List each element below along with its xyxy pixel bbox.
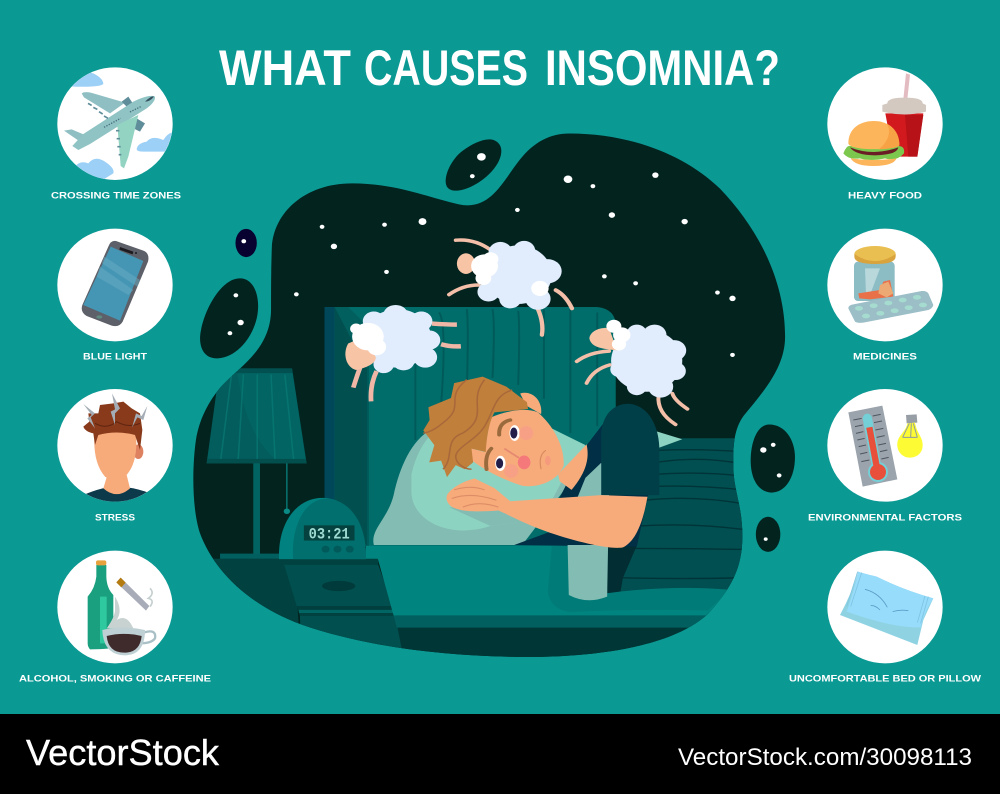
sheep: right [577, 320, 687, 424]
circle: stress [57, 389, 173, 507]
label: crossing time zones: CROSSING TIME ZONES [51, 190, 181, 200]
hair [423, 377, 528, 477]
floating blob: small navy [235, 229, 257, 257]
lightning bolts [83, 404, 95, 428]
label: uncomfortable bed: UNCOMFORTABLE BED OR PILLOW [789, 672, 981, 684]
face [470, 410, 564, 486]
floor [300, 616, 402, 648]
striped blanket [620, 438, 742, 592]
circle: medicines [827, 229, 943, 341]
footer url: VectorStock.com/30098113 [678, 744, 972, 771]
pillow [840, 572, 933, 645]
nose [504, 449, 530, 469]
cheeks [519, 426, 533, 440]
circle: uncomfortable bed or pillow [827, 551, 943, 663]
stars [228, 153, 782, 541]
alarm clock: 03:21 [309, 526, 350, 544]
label: blue light: BLUE LIGHT [83, 350, 147, 362]
ear [133, 444, 143, 459]
burger [843, 121, 904, 166]
label: stress: STRESS [95, 512, 135, 522]
soda cup [882, 73, 926, 157]
label: medicines: MEDICINES [853, 350, 917, 362]
circle: blue light [57, 229, 173, 341]
title [219, 40, 780, 96]
floating blob: right large [751, 424, 795, 493]
central night scene illustration [190, 133, 795, 667]
label: alcohol: ALCOHOL, SMOKING OR CAFFEINE [19, 672, 211, 684]
label: heavy food: HEAVY FOOD [848, 190, 922, 200]
coffee cup [102, 627, 155, 655]
sheep: top [449, 240, 572, 335]
pills in jar [858, 280, 893, 299]
circle: alcohol smoking caffeine [57, 551, 173, 663]
circle: environmental factors [827, 389, 943, 502]
bed mattress [366, 546, 732, 616]
nightstand [213, 554, 394, 624]
title: CAUSES [364, 40, 528, 96]
left icons: top pair [57, 67, 177, 341]
bedroom contents [190, 240, 751, 667]
neck [103, 475, 130, 494]
floating blob: right small [756, 517, 780, 552]
thermometer [848, 406, 897, 487]
headboard [324, 307, 617, 548]
footer brand: VectorStock [26, 732, 220, 773]
shirt [83, 487, 150, 507]
title: INSOMNIA? [545, 40, 780, 96]
man lying on pillow [423, 377, 659, 600]
steam [107, 597, 133, 628]
blanket hem [548, 546, 730, 612]
circle: heavy food [827, 67, 943, 180]
label: environmental factors: ENVIRONMENTAL FACTORS [808, 512, 962, 522]
sheep: left [345, 305, 461, 401]
ear [520, 393, 541, 414]
torso [514, 416, 653, 547]
bottle [88, 560, 113, 649]
pull cord [286, 463, 288, 509]
mouth [540, 450, 546, 469]
floating blob: left [200, 278, 258, 358]
right icons: bottom pair [827, 389, 943, 663]
far pillow corner [657, 431, 682, 449]
left icons: bottom pair [57, 389, 173, 663]
light bulb [897, 414, 923, 458]
floating blob: top [446, 139, 501, 191]
neck [558, 444, 588, 490]
clock display [304, 525, 354, 541]
black footer bar [0, 714, 1000, 794]
clouds [72, 72, 172, 179]
bed base [394, 616, 706, 628]
pillow [373, 425, 682, 545]
eyes [509, 425, 520, 441]
alarm clock [279, 498, 366, 559]
eyebrows [499, 420, 510, 435]
airplane [64, 92, 155, 168]
lamp [207, 368, 307, 555]
bedsheet strip [568, 463, 609, 600]
lamp shade [207, 368, 307, 463]
arm and hand [447, 479, 647, 548]
night sky blob [193, 133, 785, 657]
hair [83, 402, 142, 450]
face [94, 431, 136, 480]
circle: crossing time zones [57, 67, 177, 182]
title: WHAT [219, 40, 351, 96]
cigarette [116, 578, 152, 611]
pill jar [854, 246, 896, 301]
blister pack [848, 291, 933, 323]
sleeve [601, 404, 659, 495]
lamp stem [253, 463, 260, 555]
phone [82, 241, 148, 326]
right icons: top pair [827, 67, 943, 341]
